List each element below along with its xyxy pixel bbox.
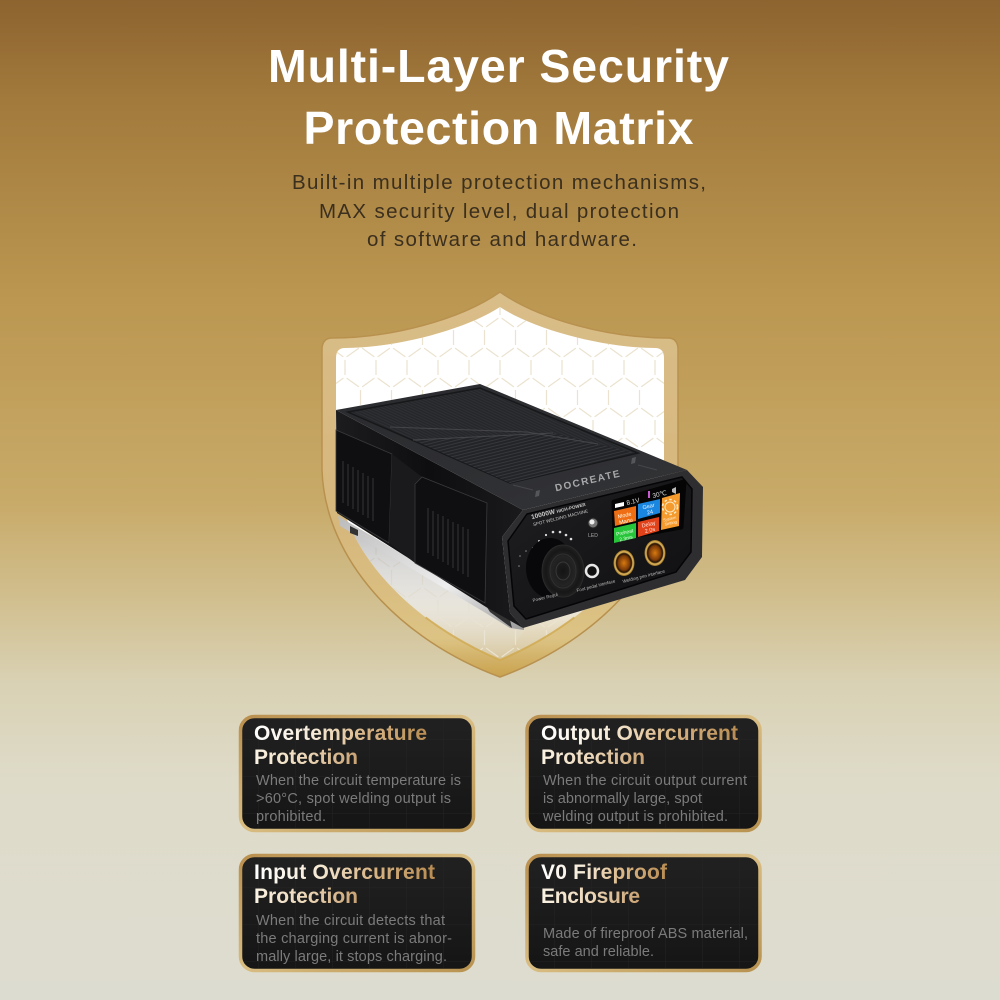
card heading bbox=[541, 861, 668, 908]
card description: welding output is prohibited. bbox=[542, 809, 728, 825]
panel captions: Power Regul bbox=[532, 592, 558, 603]
model label: 10000W HIGH-POWER bbox=[531, 501, 587, 521]
card heading: Enclosure bbox=[541, 885, 640, 908]
mode tile bbox=[614, 506, 636, 526]
feet bbox=[350, 526, 512, 628]
title: Multi-Layer Security bbox=[268, 40, 729, 92]
card description: Made of fireproof ABS material, bbox=[543, 926, 748, 942]
card: overtemperature protection bbox=[240, 716, 474, 830]
title: Protection Matrix bbox=[304, 102, 694, 154]
shield emblem bbox=[322, 292, 678, 677]
card heading: Protection bbox=[541, 746, 645, 769]
mode tile: Mode bbox=[617, 512, 632, 520]
card heading bbox=[254, 722, 427, 769]
subtitle text: of software and hardware. bbox=[367, 228, 637, 251]
panel captions bbox=[532, 568, 666, 603]
card heading: Output Overcurrent bbox=[541, 722, 738, 745]
system setting tile: Setting bbox=[664, 519, 677, 527]
honeycomb pattern bbox=[330, 300, 670, 670]
card heading bbox=[254, 861, 435, 908]
LED indicator: LED bbox=[588, 533, 598, 539]
card frame bbox=[527, 856, 760, 970]
LED indicator bbox=[588, 518, 598, 539]
title bbox=[268, 40, 729, 154]
mode tile: Manu bbox=[619, 517, 634, 526]
card description: When the circuit detects that bbox=[256, 913, 445, 929]
card grid bbox=[529, 858, 758, 968]
shield lower gold edge bbox=[426, 617, 574, 660]
subtitle text bbox=[292, 171, 706, 251]
card grid bbox=[529, 719, 758, 828]
top ribbed panel bbox=[413, 433, 635, 483]
foot pedal port bbox=[586, 565, 598, 577]
knob scale dots bbox=[518, 531, 572, 567]
card description: >60°C, spot welding output is bbox=[256, 791, 451, 807]
card heading: Overtemperature bbox=[254, 722, 427, 745]
touch screen bbox=[614, 482, 684, 544]
card grid bbox=[243, 858, 471, 968]
top mesh panel bbox=[348, 388, 638, 483]
status row: 30℃ bbox=[652, 490, 668, 500]
welding port right bbox=[644, 540, 666, 566]
card description: prohibited. bbox=[256, 809, 326, 825]
card heading: Protection bbox=[254, 746, 358, 769]
card: input overcurrent protection bbox=[240, 856, 474, 970]
card heading: V0 Fireproof bbox=[541, 861, 668, 884]
preheat tile: Preheat bbox=[616, 528, 634, 538]
card heading bbox=[541, 722, 738, 769]
front panel bbox=[502, 470, 703, 628]
delay tile: 2.0s bbox=[644, 527, 656, 535]
card grid bbox=[243, 719, 471, 828]
knob cap bbox=[542, 545, 584, 597]
shield outer ring bbox=[322, 292, 678, 677]
status row: 8.1V bbox=[626, 497, 641, 507]
card description: When the circuit output current bbox=[543, 773, 747, 789]
preheat tile: 2.3ms bbox=[619, 534, 634, 543]
gear tile: 24 bbox=[646, 509, 654, 516]
front panel inner bbox=[508, 477, 692, 619]
gear tile: Gear bbox=[642, 503, 655, 511]
card description: the charging current is abnor- bbox=[256, 931, 452, 947]
card frame bbox=[527, 716, 760, 830]
card frame bbox=[240, 716, 474, 830]
top chevron ridges bbox=[390, 427, 657, 490]
power knob bbox=[518, 531, 584, 598]
top face bbox=[336, 384, 687, 510]
gear tile bbox=[638, 499, 660, 519]
welding port left bbox=[614, 550, 634, 576]
welding machine product bbox=[336, 384, 703, 630]
status row bbox=[615, 487, 676, 508]
system setting tile: System bbox=[663, 515, 677, 522]
top slot markers bbox=[535, 457, 636, 497]
knob body bbox=[526, 538, 574, 598]
card description bbox=[256, 913, 452, 965]
system setting tile bbox=[661, 493, 680, 530]
card description bbox=[256, 773, 461, 825]
preheat tile bbox=[614, 523, 636, 544]
card description: When the circuit temperature is bbox=[256, 773, 461, 789]
delay tile bbox=[638, 517, 659, 537]
model label: SPOT WELDING MACHINE bbox=[533, 509, 588, 527]
card: V0 fireproof enclosure bbox=[527, 856, 760, 970]
card description: safe and reliable. bbox=[543, 944, 654, 960]
side panels and vents bbox=[336, 430, 487, 603]
screen background bbox=[614, 482, 684, 539]
card description bbox=[543, 926, 748, 960]
card heading: Input Overcurrent bbox=[254, 861, 435, 884]
side face bbox=[336, 410, 523, 628]
card description bbox=[542, 773, 747, 825]
shield inner fill bbox=[336, 307, 664, 660]
card description: is abnormally large, spot bbox=[543, 791, 702, 807]
card frame bbox=[240, 856, 474, 970]
subtitle text: Built-in multiple protection mechanisms, bbox=[292, 171, 706, 194]
card heading: Protection bbox=[254, 885, 358, 908]
panel captions: Foot pedal interface bbox=[576, 578, 616, 593]
delay tile: Delay bbox=[641, 521, 656, 530]
panel captions: Welding pen interface bbox=[622, 568, 666, 584]
brand name: DOCREATE bbox=[554, 469, 621, 494]
card: output overcurrent protection bbox=[527, 716, 760, 830]
chrome base strip bbox=[338, 516, 524, 630]
subtitle text: MAX security level, dual protection bbox=[319, 200, 679, 223]
card description: mally large, it stops charging. bbox=[256, 949, 447, 965]
